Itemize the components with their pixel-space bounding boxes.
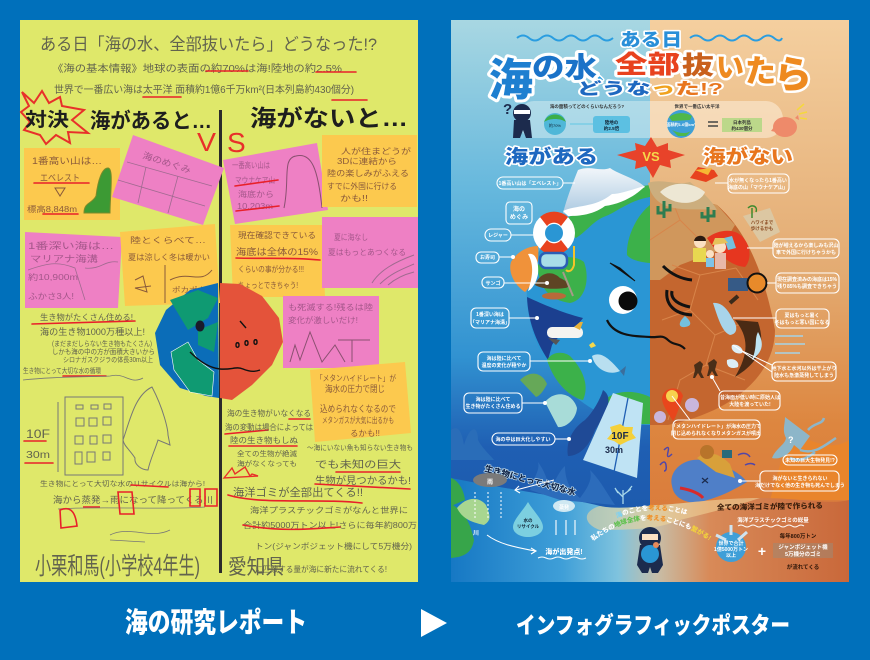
info banner: 世界で一番広い太平洋 bbox=[674, 103, 720, 110]
note: mountain without sea: 海底から bbox=[238, 189, 274, 199]
red VS S: S bbox=[227, 127, 246, 158]
writing: many creatures live bbox=[23, 312, 155, 380]
coral bbox=[615, 486, 632, 504]
writing: many creatures live: シロナガスクジラの体長30m以上 bbox=[63, 355, 153, 364]
heading: there is sea: 海がある bbox=[505, 145, 598, 168]
callout: groundwater: 陸水も急激蒸発してしまう bbox=[774, 372, 834, 379]
writing: consequences without sea bbox=[224, 408, 417, 574]
note: summer and winter comparison: 陸とくらべて… bbox=[130, 235, 206, 245]
illustration: doodles and beached whale bbox=[660, 445, 755, 503]
callout: Mauna Kea: 海底の山「マウナケア山」 bbox=[728, 184, 788, 191]
callout: deepest sea bbox=[470, 308, 539, 328]
note: mountain without sea: マウナケア山 bbox=[235, 176, 275, 185]
writing: consequences without sea: 海の生き物がいなくなる bbox=[227, 408, 311, 418]
sketch: 10F building and whale: 10F bbox=[26, 427, 50, 441]
note: summer and winter comparison: ポカポカ bbox=[172, 286, 206, 294]
note: highest mountain bbox=[24, 148, 120, 220]
illustration: road sign with palm: 歩けるかも bbox=[751, 225, 773, 232]
callout: seabed research bbox=[767, 273, 839, 293]
river label: 川 bbox=[473, 530, 479, 537]
note: no sea mountain sketch: 変化が激しいだけ! bbox=[288, 315, 358, 325]
info banner: 海の面積ってどのくらいなんだろう? bbox=[550, 103, 624, 110]
callout: temperature change: 温度の変化が穏やか bbox=[481, 362, 527, 369]
callout: land spreads: 陸が増えるから楽しみも沢山 bbox=[774, 242, 838, 249]
note: summer and winter comparison bbox=[120, 224, 220, 306]
message text: 私たちの地球全体を考えることにも繋がる! bbox=[590, 514, 712, 541]
note: blessings of the sea table: 海のめぐみ bbox=[141, 149, 192, 175]
illustration: volcano and desert mountain bbox=[648, 167, 718, 222]
info banner bbox=[518, 101, 783, 138]
writing: many creatures live: 生き物がたくさん住める! bbox=[40, 312, 133, 322]
yearly waste: が流れてくる bbox=[787, 563, 819, 571]
note: blessings of the sea table bbox=[112, 135, 224, 225]
info banner: 約2.5倍 bbox=[604, 125, 620, 132]
orange corner bbox=[770, 430, 849, 500]
callout: many creatures: 生き物がたくさん住める bbox=[465, 403, 521, 410]
callout: temperature change: 海は陸に比べて bbox=[487, 355, 521, 362]
note: deepest sea: 1番深い海は… bbox=[28, 240, 114, 251]
note: people could live on: 3Dに連結から bbox=[337, 156, 397, 166]
callout: low sea level: 大陸を渡っていた! bbox=[729, 401, 771, 408]
report basic facts: 世界で一番広い海は太平洋 面積約1億6千万km²(日本列島約430個分) bbox=[54, 83, 354, 96]
plastic waste total: + bbox=[758, 543, 766, 559]
illustration: sushi bbox=[510, 246, 538, 292]
title: main: い bbox=[716, 52, 744, 83]
callout: temperature change bbox=[478, 352, 592, 371]
writing: consequences without sea: 生物が見つかるかも! bbox=[315, 474, 411, 487]
callout: sushi: お寿司 bbox=[480, 254, 495, 261]
title: main: の水 bbox=[532, 52, 597, 83]
callout: blessings of the sea: 海の bbox=[513, 205, 525, 213]
collage earth: sea half bbox=[155, 283, 220, 398]
illustration: 10 floors 30m scale: 10F bbox=[611, 431, 629, 442]
center divider line bbox=[219, 110, 222, 573]
illustration: fish bbox=[589, 342, 626, 376]
writing: many creatures live: しかも海の中の方が面積大きいから bbox=[52, 347, 155, 356]
note: highest mountain: 1番高い山は… bbox=[32, 155, 102, 166]
note: people could live on: 陸の楽しみがふえる bbox=[327, 168, 409, 178]
writing: consequences without sea: トン(ジャンボジェット機にして5万機分) bbox=[255, 541, 412, 551]
writing: consequences without sea: 海洋ゴミが全部出てくる!! bbox=[233, 485, 363, 499]
note: people could live on bbox=[322, 135, 417, 207]
illustration: road sign with palm: ハワイまで bbox=[751, 219, 774, 226]
water cycle diagram bbox=[451, 473, 586, 559]
writing: consequences without sea: 合計約5000万トン以上!さらに毎年約800万 bbox=[243, 520, 417, 530]
note: current land bbox=[230, 225, 325, 297]
title: main: 抜 bbox=[682, 52, 714, 80]
note: methane hydrate: 込められなくなるので bbox=[320, 404, 396, 414]
callout: land ruins bbox=[738, 471, 845, 491]
callout: low sea level bbox=[710, 375, 780, 410]
note: methane hydrate: るかも!! bbox=[350, 429, 380, 438]
icon: ninja holding earth bbox=[637, 527, 663, 573]
burst: 対決: 対決 bbox=[25, 109, 69, 131]
note: summer and winter comparison: 夏は涼しく冬は暖かい bbox=[128, 252, 210, 262]
cloud evaporation: 蒸発 bbox=[559, 504, 569, 511]
rain lines bbox=[475, 492, 501, 520]
character: sea half of earth bbox=[527, 185, 650, 425]
illustration: blue whale bbox=[568, 390, 608, 456]
plastic waste total: 世界で合計 bbox=[718, 540, 744, 547]
writing: researcher name: 小栗和馬(小学校4年生) bbox=[35, 553, 200, 580]
note: current land: ちょっとできちゃう! bbox=[238, 281, 298, 290]
illustration: cavemen bbox=[693, 359, 718, 378]
note: deepest sea: マリアナ海溝 bbox=[30, 253, 98, 264]
arrows bbox=[487, 480, 575, 554]
callout: low sea level: 昔海面が低い時に原始人は bbox=[720, 394, 780, 401]
note: people could live on: かも!! bbox=[340, 194, 368, 203]
callout: highest mountain: 1番高い山は「エベレスト」 bbox=[499, 180, 561, 187]
callout: hotter summers bbox=[733, 309, 830, 328]
writing: many creatures live: (まだまだしらない生き物もたくさん) bbox=[52, 339, 152, 348]
illustration: methane vent bbox=[654, 388, 699, 423]
heading: with sea: 海があると… bbox=[90, 109, 212, 133]
land hills bbox=[451, 478, 474, 558]
illustration: squid: ? bbox=[788, 435, 794, 445]
info banner: 面積約1.6億km² bbox=[667, 121, 696, 127]
note: summer heat bbox=[322, 217, 418, 288]
message text: 海のことを考えることは bbox=[616, 504, 688, 518]
callout: giant creatures: 海の中は巨大化しやすい bbox=[496, 436, 550, 443]
callout: giant creatures may be found bbox=[783, 455, 837, 465]
icon: ninja with question mark bbox=[503, 101, 532, 138]
callout: land ruins: 海がないと生きられない bbox=[772, 475, 828, 482]
yearly waste bbox=[773, 532, 833, 571]
report basic facts: 《海の基本情報》地球の表面の約70%は海!陸地の約2.5% bbox=[52, 62, 342, 75]
collage earth: land half bbox=[220, 283, 283, 400]
yearly waste: ジャンボジェット機 bbox=[778, 543, 828, 551]
sea starting point: 海が出発点! bbox=[545, 547, 583, 556]
callouts: land side bbox=[671, 174, 839, 439]
panel: infographic poster bbox=[451, 20, 849, 582]
illustration: family and red car bbox=[693, 231, 750, 269]
illustration: sea grid disk bbox=[545, 394, 577, 427]
note: highest mountain: エベレスト bbox=[40, 173, 80, 183]
report basic facts bbox=[52, 62, 367, 100]
note: mountain without sea: 10,203m bbox=[237, 202, 273, 211]
icon: pink creature bbox=[771, 104, 807, 137]
callout: giant creatures may be found: 未知の巨大生物発見!? bbox=[785, 457, 835, 464]
writing: consequences without sea: 全ての生物が絶滅 bbox=[237, 449, 297, 458]
illustration: dark seaweed bbox=[451, 428, 494, 460]
illustration: snowy mountain bbox=[563, 168, 645, 216]
writing: consequences without sea: 海がなくなっても bbox=[237, 459, 297, 468]
callout: blessings of the sea: めぐみ bbox=[510, 214, 528, 221]
illustration: road sign with palm bbox=[743, 206, 780, 242]
heading: important for life: 生き物にとって大切な水 bbox=[483, 463, 577, 497]
callout: seabed research: 現在調査済みの海底は15% bbox=[777, 276, 838, 283]
illustration: 10 floors 30m scale bbox=[583, 393, 643, 478]
callout: methane hydrate: 「メタンハイドレート」が海水の圧力で bbox=[671, 423, 761, 430]
title: main: ら bbox=[774, 55, 812, 97]
note: no sea mountain sketch: も死滅する!残るは陸 bbox=[288, 302, 373, 312]
title: one day bbox=[517, 30, 782, 50]
band: pale wave divider bbox=[587, 498, 760, 530]
callout: hotter summers: 冬はもっと寒い国になる bbox=[774, 319, 830, 326]
title: main: 全部 bbox=[615, 51, 680, 79]
writing: water recycling: 生き物にとって大切な水のリサイクルは海から! bbox=[40, 479, 205, 488]
note: methane hydrate: メタンガスが大気に出るかも bbox=[322, 415, 394, 425]
writing: consequences without sea: でも未知の巨大 bbox=[315, 458, 401, 471]
label: research report: 海の研究レポート bbox=[125, 607, 307, 638]
callout: deepest sea: 「マリアナ海溝」 bbox=[470, 319, 510, 326]
note: methane hydrate: 海水の圧力で閉じ bbox=[325, 383, 385, 394]
illustration: squid bbox=[772, 417, 836, 460]
callout: many creatures bbox=[464, 393, 547, 413]
info banner: 約70% bbox=[549, 122, 561, 128]
plastic waste total: 1億5000万トン bbox=[714, 546, 748, 553]
panel: ocean research report bbox=[20, 20, 418, 582]
plastic waste total: 海洋プラスチックゴミの総量 bbox=[737, 516, 809, 524]
yearly waste: 5万機分のゴミ bbox=[785, 550, 821, 558]
callout: coral bbox=[482, 277, 549, 288]
title: main: 海 bbox=[489, 56, 533, 105]
illustration: cracked trench with water bbox=[727, 320, 805, 377]
callout: groundwater: 地下水と水河以外は干上がり bbox=[771, 365, 837, 372]
callout: land ruins: 海だけでなく他の生き物も死んでしまう bbox=[755, 482, 845, 489]
writing: water recycling: 海から蒸発→雨になって降ってくる川 bbox=[53, 494, 213, 505]
arrow bbox=[421, 609, 447, 637]
VS star bbox=[617, 137, 685, 178]
writing: many creatures live: 生き物にとって大切な水の循環 bbox=[23, 366, 101, 375]
message text bbox=[590, 504, 712, 541]
water drop: リサイクル bbox=[517, 523, 540, 530]
illustration: magnifier and map bbox=[728, 274, 766, 303]
note: current land: 現在確認できている bbox=[238, 230, 316, 240]
writing: prefecture: 愛知県 bbox=[228, 556, 284, 579]
note: deepest sea bbox=[25, 232, 122, 308]
note: current land: くらいの事が分かる!!! bbox=[238, 264, 304, 274]
callout: giant creatures bbox=[492, 433, 571, 445]
callout: methane hydrate: 閉じ込められなくなりメタンガスが噴出 bbox=[671, 430, 761, 437]
callout: blessings of the sea bbox=[506, 202, 532, 224]
callout: Mauna Kea bbox=[715, 174, 789, 193]
writing: consequences without sea: 陸の生き物もしぬ bbox=[230, 435, 298, 445]
report title: ある日「海の水、全部抜いたら」どうなった!? bbox=[40, 35, 377, 54]
note: highest mountain: 標高8,848m bbox=[27, 204, 77, 214]
note: mountain without sea bbox=[223, 143, 328, 224]
plastic waste total bbox=[714, 516, 809, 562]
red VS: V bbox=[197, 127, 217, 157]
heading: all marine waste: 全ての海洋ゴミが陸で作られる bbox=[717, 500, 823, 512]
label: infographic poster: インフォグラフィックポスター bbox=[516, 612, 790, 638]
water drop: 水の bbox=[524, 517, 533, 524]
character: land half of earth bbox=[650, 187, 775, 425]
illustration: snorkel goggles bbox=[540, 246, 574, 271]
callout: many creatures: 海は陸に比べて bbox=[476, 396, 510, 403]
illustration: coral rock and crab bbox=[535, 272, 573, 300]
note: summer heat: 夏に海なし bbox=[334, 232, 368, 242]
callout: methane hydrate bbox=[671, 396, 761, 439]
title: main bbox=[489, 51, 812, 105]
title: main: 、 bbox=[597, 67, 613, 84]
illustration: land grid disk bbox=[520, 374, 547, 397]
note: no sea mountain sketch bbox=[283, 296, 379, 368]
burst: 対決 bbox=[21, 91, 88, 144]
title: main: た bbox=[745, 54, 776, 89]
note: current land: 海底は全体の15% bbox=[236, 246, 318, 257]
callout: leisure: レジャー bbox=[488, 233, 508, 239]
illustration: submarine bbox=[547, 322, 583, 345]
note: methane hydrate: 「メタンハイドレート」が bbox=[316, 373, 396, 383]
writing: consequences without sea: 海洋プラスチックゴミがなんと世界に bbox=[250, 505, 408, 515]
water drop bbox=[513, 502, 543, 537]
callout: leisure bbox=[485, 229, 539, 241]
writing: water recycling bbox=[40, 479, 217, 542]
illustration: stranded dolphin bbox=[713, 303, 736, 335]
callout: seabed research: 残り85%も調査できちゃう bbox=[777, 283, 837, 290]
writing: consequences without sea: 海の変動は場合によっては bbox=[225, 422, 313, 432]
callout: hotter summers: 夏はもっと暑く bbox=[784, 312, 820, 319]
note: methane hydrate bbox=[310, 362, 411, 442]
note: people could live on: すでに外国に行ける bbox=[327, 181, 397, 191]
callout: land spreads: 車で外国に行けちゃうかも bbox=[776, 249, 836, 256]
plastic waste total: 以上 bbox=[726, 552, 736, 559]
sketch: 10F building and whale bbox=[24, 387, 170, 475]
callout: coral: サンゴ bbox=[485, 280, 501, 287]
character face bbox=[607, 263, 692, 349]
writing: consequences without sea: 〜海にいない魚も知らない生き物も bbox=[307, 443, 413, 452]
writing: many creatures live: 海の生き物1000万種以上! bbox=[40, 326, 145, 337]
note: deepest sea: 約10,900m bbox=[28, 272, 78, 282]
seaweed silhouettes bbox=[530, 462, 615, 505]
illustration: 10 floors 30m scale: 30m bbox=[605, 445, 623, 455]
note: people could live on: 人が住まどうが bbox=[341, 146, 411, 156]
note: deepest sea: ふかさ3人! bbox=[28, 292, 74, 301]
callouts: sea side bbox=[464, 177, 592, 445]
callout: sushi bbox=[476, 252, 515, 263]
info banner: 約430個分 bbox=[731, 125, 753, 132]
info banner: 陸地の bbox=[605, 119, 619, 126]
callout: land spreads bbox=[747, 239, 839, 258]
bottom section bbox=[451, 478, 849, 582]
callout: Mauna Kea: 水が無くなったら1番高い bbox=[729, 177, 787, 184]
illustration: life ring bbox=[533, 212, 575, 254]
info banner: 日本列島 bbox=[733, 119, 751, 126]
callout: groundwater bbox=[733, 345, 837, 381]
heading: without sea: 海がないと… bbox=[250, 105, 408, 131]
light green hill bbox=[457, 499, 490, 525]
writing: consequences without sea: に匹敵する量が海に新たに流れてくる! bbox=[255, 564, 387, 574]
VS star: VS bbox=[642, 149, 660, 164]
cloud rain: 雨 bbox=[487, 479, 493, 486]
icon: ninja with question mark: ? bbox=[503, 101, 512, 118]
note: mountain without sea: 一番高い山は bbox=[232, 160, 270, 170]
title: one day: ある日 bbox=[620, 30, 682, 50]
yearly waste: 毎年800万トン bbox=[780, 532, 817, 540]
note: summer heat: 夏はもっとあつくなる bbox=[328, 248, 406, 257]
heading: no sea: 海がない bbox=[703, 145, 793, 168]
title: main: どう な っ た!? bbox=[577, 79, 723, 98]
callout: highest mountain bbox=[497, 177, 575, 189]
callout: deepest sea: 1番深い海は bbox=[476, 311, 504, 318]
sketch: 10F building and whale: 30m bbox=[26, 450, 50, 461]
